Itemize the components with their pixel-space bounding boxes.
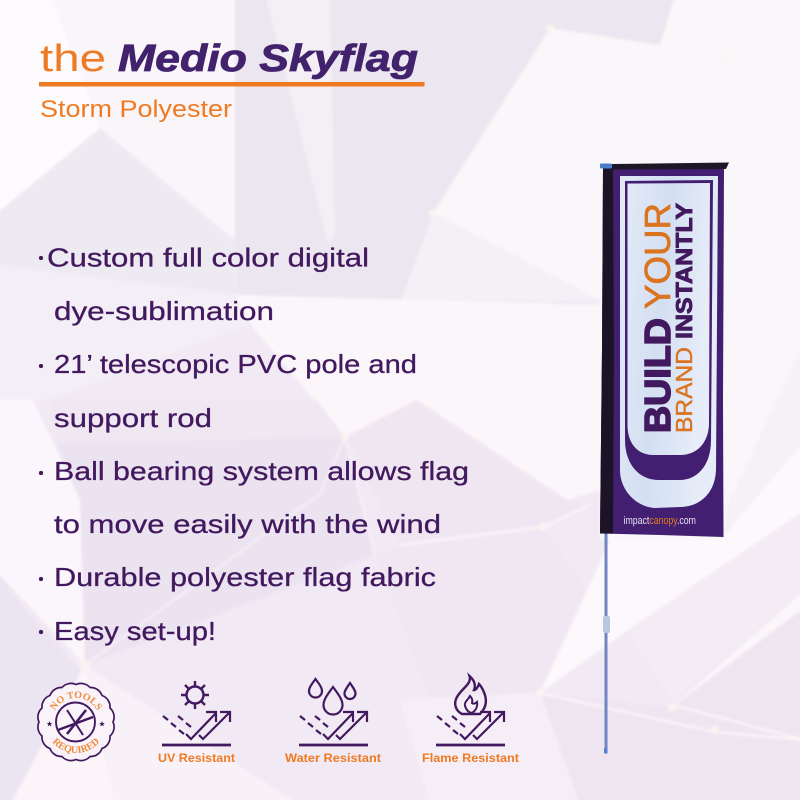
pole tip — [604, 748, 608, 754]
flag text: BUILD: BUILD — [637, 318, 678, 433]
badge text top: NO TOOLS — [49, 691, 102, 710]
title underline — [39, 82, 424, 86]
sun — [181, 681, 209, 709]
subtitle: Storm Polyester — [40, 96, 232, 123]
arrows and base — [299, 712, 368, 745]
bullet: ball bearing: Ball bearing system allows flag — [54, 456, 469, 486]
title: the — [40, 38, 106, 80]
flag purple band — [625, 180, 713, 480]
flag text: YOUR: YOUR — [637, 203, 678, 309]
bullet: ball bearing: to move easily with the wind — [54, 509, 441, 539]
bullet: custom color: dye-sublimation — [54, 296, 274, 326]
top sleeve — [612, 162, 729, 170]
water drops — [309, 679, 356, 714]
flag url: impactcanopy.com — [624, 515, 696, 527]
badge: no tools required — [37, 682, 115, 762]
badge text bottom: REQUIRED — [52, 738, 98, 754]
flag inner white panel — [628, 183, 710, 455]
flag outer white panel — [620, 176, 718, 508]
label: UV resistant: UV Resistant — [158, 753, 235, 765]
bullet: custom color: Custom full color digital — [47, 242, 369, 272]
bullet: ball bearing — [39, 456, 469, 539]
flame — [455, 676, 486, 714]
feature list — [39, 242, 469, 646]
label: water resistant: Water Resistant — [285, 753, 381, 765]
title — [40, 38, 418, 80]
bullet: fabric: Durable polyester flag fabric — [54, 562, 436, 592]
flag body — [600, 168, 724, 537]
bullet: pole: support rod — [54, 403, 212, 433]
flag pole — [603, 533, 610, 754]
label: flame resistant: Flame Resistant — [422, 753, 519, 765]
flag text: BRAND: BRAND — [671, 347, 697, 433]
bullet: pole — [39, 349, 417, 433]
title: Medio Skyflag — [118, 38, 418, 80]
icon: water resistant — [299, 679, 368, 745]
pole joint — [603, 616, 610, 633]
flag sleeve — [600, 168, 614, 534]
flag — [600, 162, 729, 537]
arrows and base — [436, 712, 505, 745]
bullet: custom color — [39, 242, 369, 326]
wrench — [67, 710, 83, 735]
prohibition strike — [58, 717, 93, 730]
icon: flame resistant — [436, 676, 505, 745]
pole clip — [600, 164, 612, 168]
arrows and base — [162, 712, 231, 745]
flag text: INSTANTLY: INSTANTLY — [671, 203, 697, 339]
bullet: pole: 21’ telescopic PVC pole and — [54, 349, 417, 379]
badge stars — [47, 721, 105, 726]
icon: UV resistant — [162, 681, 231, 745]
screwdriver — [67, 710, 86, 734]
bullet: set-up: Easy set-up! — [54, 616, 216, 646]
